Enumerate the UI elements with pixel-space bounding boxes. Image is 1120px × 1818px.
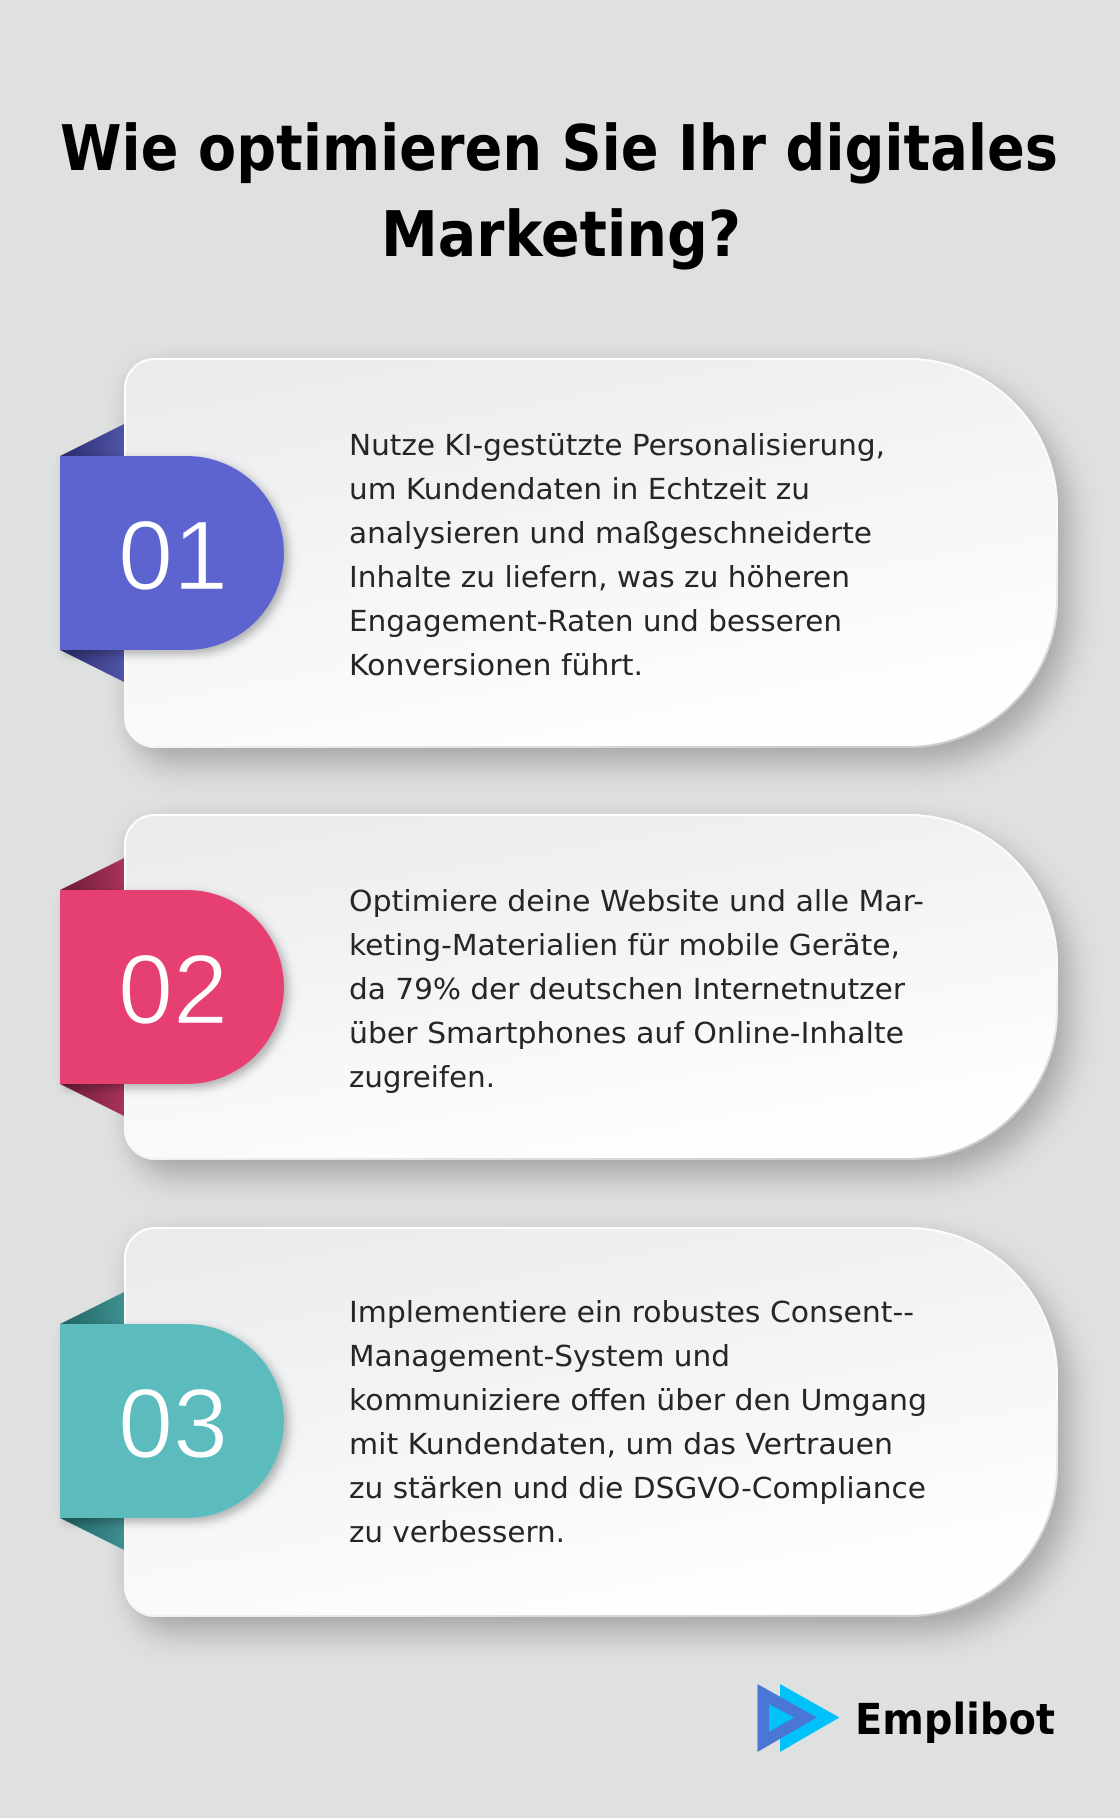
fold bottom 2: [60, 1084, 124, 1116]
text 2: [349, 884, 924, 1094]
text 3: zu verbessern.: [349, 1515, 565, 1549]
text 1: Nutze KI-gestützte Personalisierung,: [349, 428, 885, 462]
logo wordmark: Emplibot: [855, 1695, 1055, 1745]
number 02: 02: [118, 934, 228, 1044]
title: Marketing?: [381, 198, 741, 271]
text 2: über Smartphones auf Online-Inhalte: [349, 1016, 904, 1050]
text 2: keting-Materialien für mobile Geräte,: [349, 928, 900, 962]
card 3: [125, 1228, 1057, 1616]
text 2: zugreifen.: [349, 1060, 495, 1094]
text 1: Konversionen führt.: [349, 648, 643, 682]
text 1: Inhalte zu liefern, was zu höheren: [349, 560, 850, 594]
panel: step 1: [60, 359, 1057, 747]
number 03: 03: [118, 1368, 228, 1478]
text 1: Engagement-Raten und besseren: [349, 604, 842, 638]
badge 1: [60, 456, 284, 650]
fold top 1: [60, 424, 124, 456]
text 1: [349, 428, 885, 682]
text 1: um Kundendaten in Echtzeit zu: [349, 472, 810, 506]
badge 2: [60, 890, 284, 1084]
text 3: Implementiere ein robustes Consent--: [349, 1295, 914, 1329]
panel: step 3: [60, 1228, 1057, 1616]
text 3: zu stärken und die DSGVO-Compliance: [349, 1471, 926, 1505]
text 3: kommuniziere offen über den Umgang: [349, 1383, 927, 1417]
badge 3: [60, 1324, 284, 1518]
fold top 3: [60, 1292, 124, 1324]
icon: play triangles: [758, 1684, 840, 1752]
number 01: 01: [118, 500, 228, 610]
fold bottom 3: [60, 1518, 124, 1550]
fold top 2: [60, 858, 124, 890]
text 3: Management-System und: [349, 1339, 730, 1373]
text 3: mit Kundendaten, um das Vertrauen: [349, 1427, 893, 1461]
fold bottom 1: [60, 650, 124, 682]
card 1: [125, 359, 1057, 747]
text 1: analysieren und maßgeschneiderte: [349, 516, 872, 550]
logo: Emplibot: [758, 1684, 1055, 1752]
text 3: [349, 1295, 927, 1549]
title: [60, 112, 1058, 271]
card 2: [125, 815, 1057, 1159]
text 2: da 79% der deutschen Internetnutzer: [349, 972, 905, 1006]
text 2: Optimiere deine Website und alle Mar-: [349, 884, 924, 918]
panel: step 2: [60, 815, 1057, 1159]
